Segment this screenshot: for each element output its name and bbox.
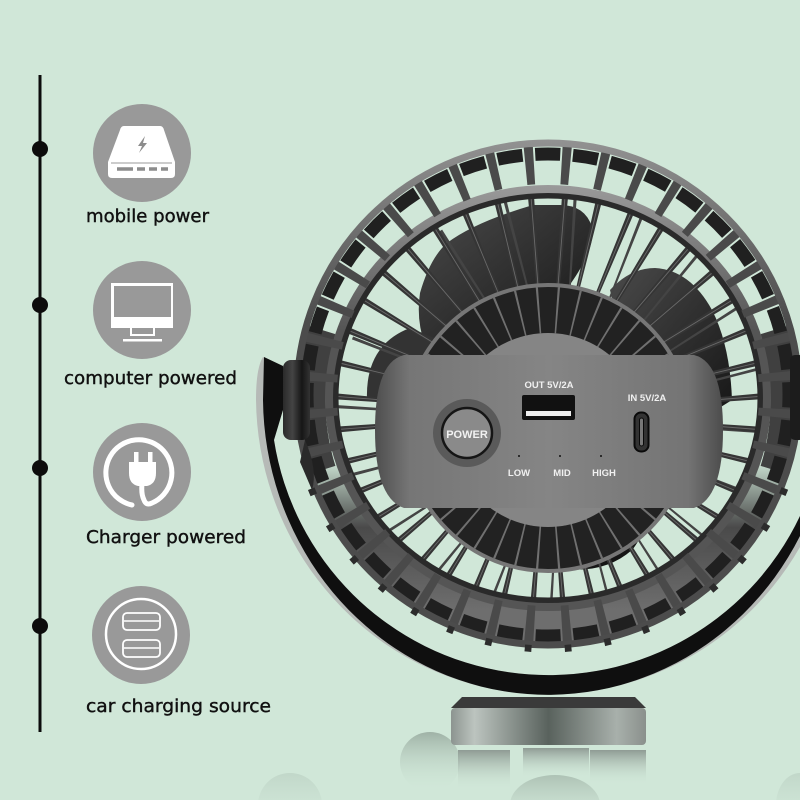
spoke ring bbox=[335, 195, 761, 601]
item: car charging source bbox=[86, 586, 271, 717]
fan stand arc bbox=[256, 357, 800, 695]
label: charger powered: Charger powered bbox=[86, 527, 246, 548]
grey cage band bbox=[329, 189, 767, 607]
front radial spokes bbox=[378, 243, 718, 583]
back grille spokes bbox=[392, 250, 732, 590]
speed indicators bbox=[508, 455, 616, 479]
label: mobile power: mobile power bbox=[86, 206, 210, 227]
lower inner wall of cage bbox=[316, 162, 780, 626]
icon: plug bbox=[93, 423, 191, 521]
inner disc bbox=[405, 285, 691, 571]
USB-C input port: IN 5V/2A bbox=[628, 393, 666, 404]
left side wall bbox=[311, 330, 322, 470]
speed indicators: MID bbox=[553, 468, 571, 479]
rim bbox=[297, 143, 799, 645]
spoke highlights bbox=[378, 243, 718, 583]
inner ribs bbox=[430, 310, 666, 546]
speed indicators: LOW bbox=[508, 468, 530, 479]
power button: POWER bbox=[446, 429, 488, 441]
control panel bbox=[375, 333, 723, 527]
USB-C input port bbox=[628, 393, 666, 452]
outer cage dark cells bbox=[307, 154, 789, 636]
speed indicators: HIGH bbox=[592, 468, 616, 479]
right side wall bbox=[774, 330, 785, 470]
label: car charging source: car charging source bbox=[86, 696, 271, 717]
timeline line with dots bbox=[32, 75, 48, 732]
item: mobile power bbox=[86, 104, 210, 227]
USB output port: OUT 5V/2A bbox=[524, 380, 574, 391]
fan pivots bbox=[283, 355, 800, 490]
icon: USB ports bbox=[92, 586, 190, 684]
USB output port bbox=[522, 380, 575, 420]
cage ribs bbox=[317, 164, 779, 626]
item: computer powered bbox=[64, 261, 237, 389]
item: charger powered bbox=[86, 423, 246, 548]
fan grille bbox=[293, 139, 800, 649]
power button bbox=[433, 399, 501, 467]
label: computer powered: computer powered bbox=[64, 368, 237, 389]
fan blades bbox=[367, 205, 732, 570]
icon: monitor bbox=[93, 261, 191, 359]
icon: power bank bbox=[93, 104, 191, 202]
panel body bbox=[375, 333, 723, 527]
rim teeth lower half bbox=[308, 487, 788, 652]
clip base and faded feet bbox=[258, 697, 800, 800]
